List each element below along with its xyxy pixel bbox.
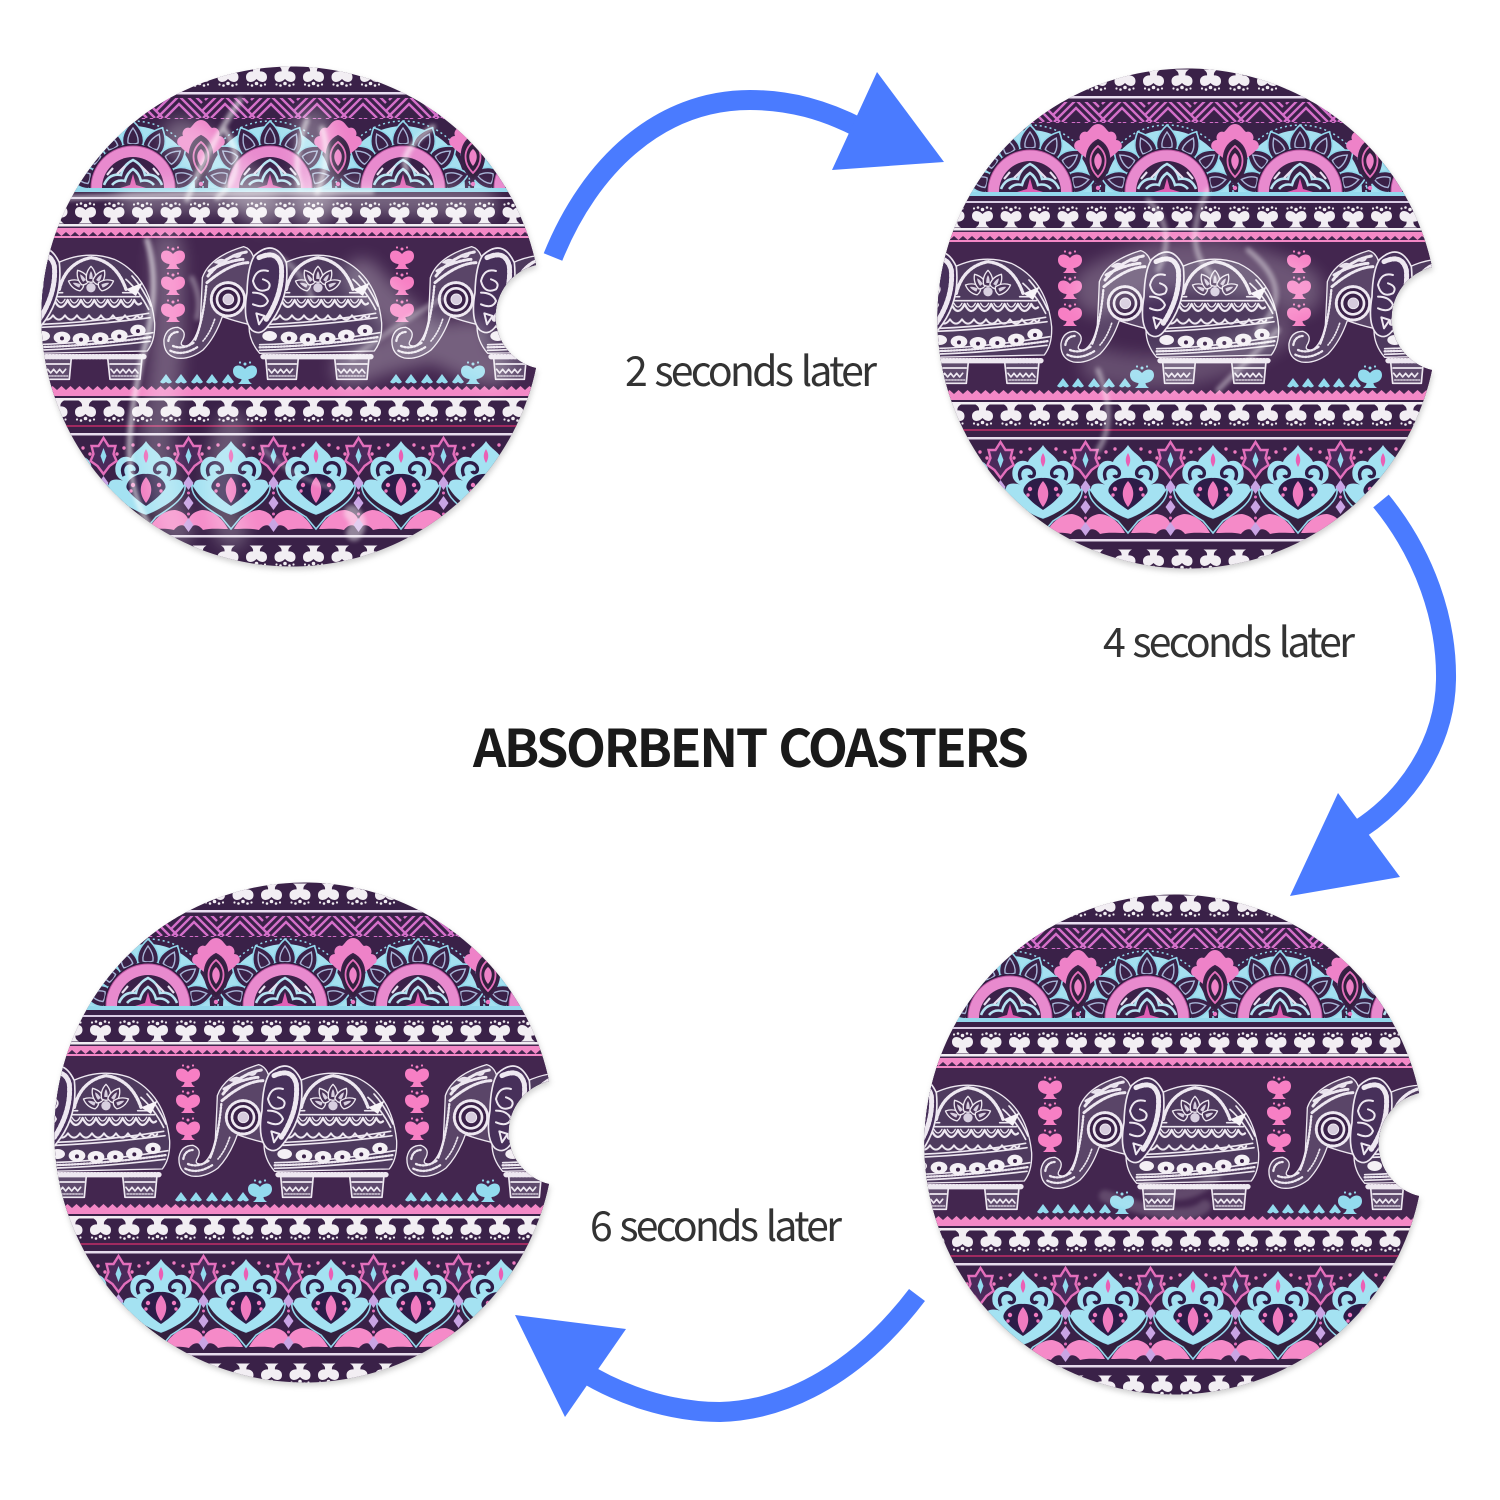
arrow: right, second to third coaster bbox=[1290, 501, 1446, 896]
coaster: 2 seconds later bbox=[936, 68, 1434, 574]
arrow: bottom, third to fourth coaster bbox=[515, 1295, 917, 1417]
label: 2 seconds later: 2 seconds later bbox=[625, 338, 877, 398]
label: 6 seconds later: 6 seconds later bbox=[590, 1193, 842, 1253]
moisture haze bbox=[1098, 190, 1298, 450]
moisture haze bbox=[1105, 1176, 1215, 1214]
title: ABSORBENT COASTERS bbox=[472, 707, 1029, 782]
arrow: top, first to second coaster bbox=[553, 72, 944, 257]
coaster: 6 seconds later, dry bbox=[52, 882, 552, 1388]
coaster: 4 seconds later bbox=[922, 894, 1422, 1400]
coaster: start, heavy moisture bbox=[40, 66, 538, 572]
moisture haze bbox=[62, 100, 492, 533]
label: 4 seconds later: 4 seconds later bbox=[1103, 609, 1355, 669]
